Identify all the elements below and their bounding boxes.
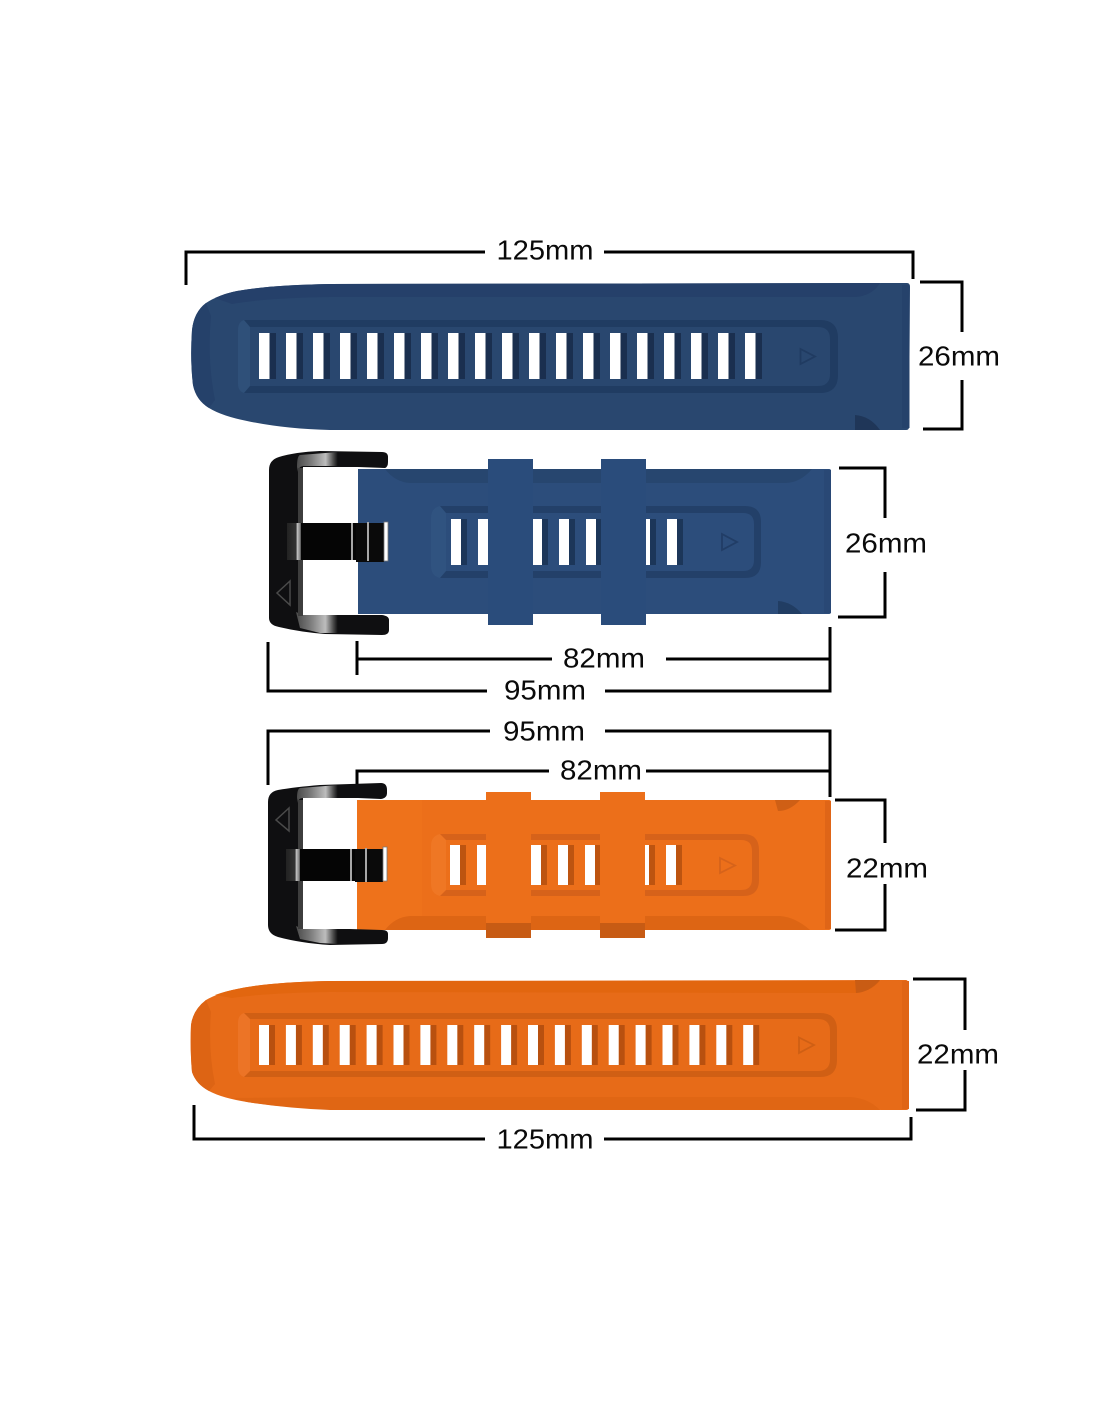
arrow mark <box>720 858 735 873</box>
lug notch <box>855 415 880 430</box>
slot recess <box>431 834 759 896</box>
dimension: 82mm orange <box>357 754 830 788</box>
dimension: 125mm bottom: 125mm <box>496 1124 594 1154</box>
slot shadows <box>460 845 683 885</box>
dimension: 95mm orange: 95mm <box>503 716 585 746</box>
slot recess <box>431 506 761 578</box>
dimension: 26mm long strap: 26mm <box>918 340 1000 372</box>
pin keeper <box>356 523 384 562</box>
navy long strap <box>191 283 910 430</box>
strap body <box>191 980 909 1110</box>
dimension: 95mm navy <box>268 627 830 706</box>
loop 1 <box>486 792 531 938</box>
light left section <box>357 800 422 930</box>
strap body <box>191 283 910 430</box>
lug notch <box>855 980 880 993</box>
top arm shine <box>297 452 338 472</box>
slot recess <box>238 1013 837 1077</box>
inner edge <box>298 800 303 929</box>
dimension: 22mm long strap: 22mm <box>917 1038 999 1070</box>
strap body <box>358 469 831 614</box>
dimension: 125mm top: 125mm <box>496 234 594 266</box>
strap body <box>357 800 831 930</box>
top edge band <box>385 469 812 483</box>
end edge <box>825 801 831 929</box>
tip bevel <box>191 303 215 408</box>
lug notch <box>775 800 800 811</box>
triangle mark <box>277 581 290 605</box>
navy strap buckle <box>269 451 389 635</box>
end edge <box>824 470 831 613</box>
navy buckle strap <box>358 459 831 625</box>
end edge <box>902 285 910 428</box>
slots <box>451 519 678 565</box>
dimension: 22mm buckle strap: 22mm <box>846 852 928 884</box>
dimension: 26mm long strap <box>918 282 1000 429</box>
dimension: 22mm long strap <box>913 979 999 1110</box>
slot recess <box>238 320 838 393</box>
bottom arm shine <box>296 612 338 633</box>
dimension: 95mm navy: 95mm <box>504 674 586 706</box>
dimension: 26mm buckle strap: 26mm <box>845 528 927 558</box>
slot shadows <box>270 333 762 379</box>
bottom edge band <box>232 1097 880 1110</box>
triangle mark <box>276 808 289 831</box>
slots <box>259 1025 755 1065</box>
bottom arm shine <box>296 926 338 944</box>
slots <box>450 845 677 885</box>
end edge <box>902 981 909 1109</box>
dimension: 125mm bottom <box>194 1105 911 1154</box>
arrow mark <box>722 534 737 550</box>
arrow mark <box>799 1038 814 1053</box>
dimension: 125mm top <box>186 234 913 285</box>
bottom edge band <box>385 916 810 930</box>
tip bevel <box>191 1000 215 1091</box>
lug notch <box>778 601 802 614</box>
top arm shine <box>297 785 338 803</box>
loop 2 <box>600 792 645 938</box>
dimension: 82mm navy <box>357 641 830 675</box>
slot shadows <box>461 519 684 565</box>
buckle pin <box>286 849 357 881</box>
orange long strap <box>191 980 909 1110</box>
orange strap buckle <box>268 783 388 945</box>
dimension: 82mm navy: 82mm <box>563 642 645 674</box>
buckle frame <box>269 451 389 635</box>
dimension: 26mm buckle strap <box>838 468 927 617</box>
orange buckle strap <box>357 792 831 938</box>
loop 2 <box>601 459 646 625</box>
arrow mark <box>800 349 815 364</box>
loop 1 <box>488 459 533 625</box>
slot shadows <box>269 1025 761 1065</box>
pin keeper <box>355 849 383 882</box>
slots <box>259 333 756 379</box>
buckle frame <box>268 783 388 945</box>
top edge band <box>215 283 880 304</box>
inner edge <box>298 468 303 616</box>
dimension: 82mm orange: 82mm <box>560 754 642 786</box>
dimension: 22mm buckle strap <box>835 800 928 930</box>
dimension: 95mm orange <box>268 716 830 797</box>
buckle pin <box>287 523 358 560</box>
top edge band <box>215 981 880 998</box>
